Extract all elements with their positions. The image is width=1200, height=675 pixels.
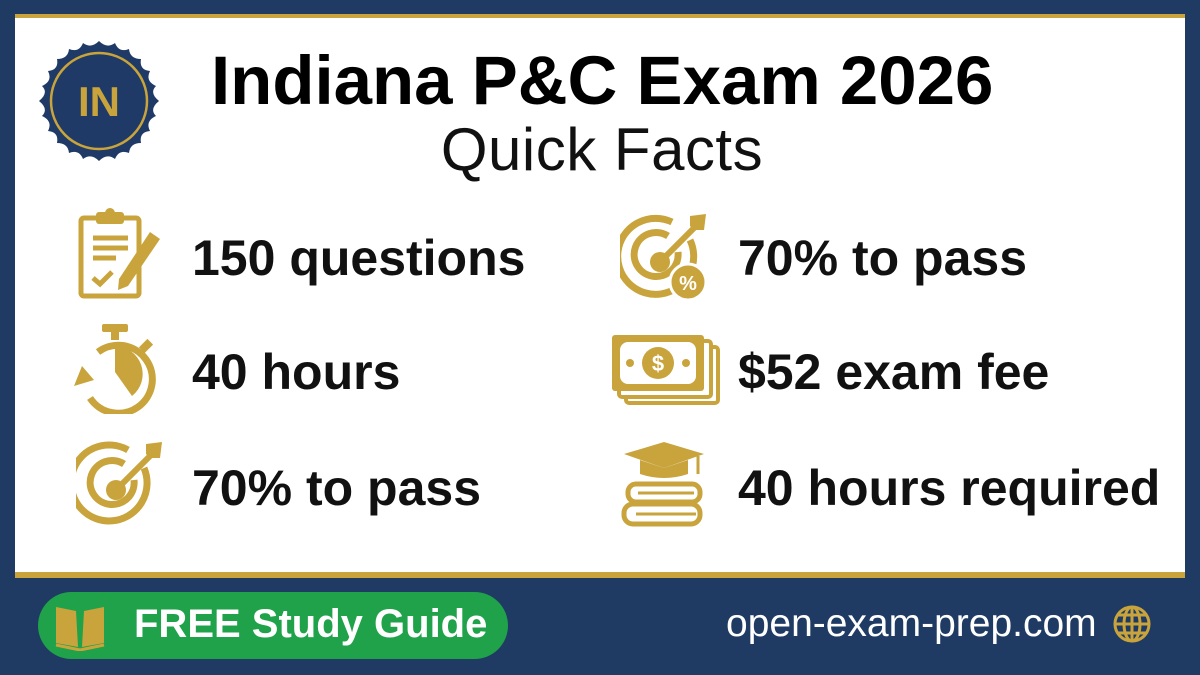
text: 70% to pass: 70% to pass: [192, 460, 481, 516]
button: FREE Study Guide: [38, 592, 508, 659]
text: 70% to pass right: 70% to pass: [738, 230, 1027, 286]
text: website: open-exam-prep.com: [726, 602, 1097, 645]
icon: IN badge: [39, 41, 159, 161]
text: $52 exam fee: $52 exam fee: [738, 344, 1049, 400]
icon: book: [56, 607, 104, 651]
title: Indiana P&C Exam 2026: [211, 42, 993, 119]
icon: target with percent: [620, 214, 706, 298]
icon: globe: [1114, 606, 1150, 642]
subtitle: Quick Facts: [441, 116, 763, 183]
icon: money: [612, 335, 720, 405]
icon: graduation cap and books: [622, 442, 704, 526]
text: FREE Study Guide: FREE Study Guide: [134, 602, 487, 646]
icon: money: $: [652, 351, 664, 376]
text: 40 hours: 40 hours: [192, 344, 400, 400]
text: 150 questions: 150 questions: [192, 230, 525, 286]
icon: target with percent: %: [679, 273, 697, 295]
icon: clipboard: [78, 208, 160, 298]
icon: stopwatch: [74, 324, 156, 414]
icon: target: [76, 442, 162, 524]
text: 40 hours required: 40 hours required: [738, 460, 1160, 516]
icon: IN badge: IN: [78, 78, 120, 125]
